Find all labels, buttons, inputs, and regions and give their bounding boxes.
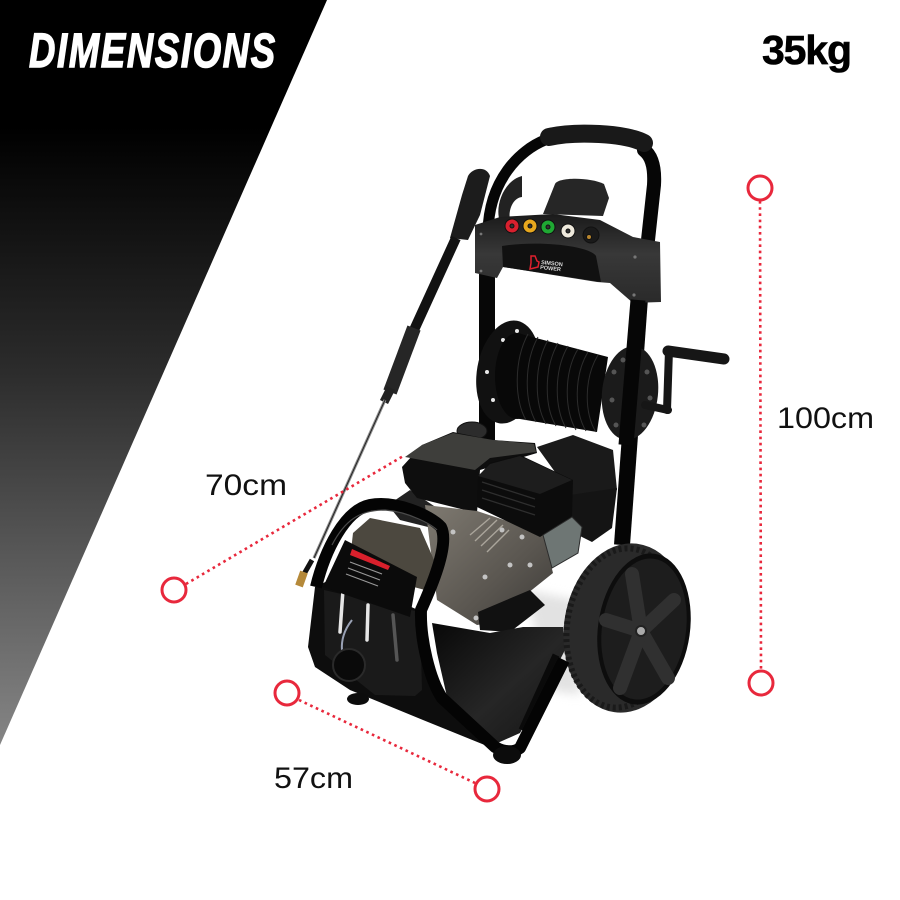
carburettor cover [543, 517, 582, 568]
upright clamp over reel [626, 300, 638, 445]
engine cover top face [405, 433, 536, 470]
fuel tank [537, 435, 617, 503]
front plate shell [308, 575, 497, 750]
frame feet [347, 693, 521, 764]
height dimension line [748, 176, 773, 695]
fuel cap [457, 422, 487, 440]
spray lance [299, 169, 490, 586]
brand logo: SIMSON [541, 260, 563, 268]
wheel [553, 535, 700, 721]
right upright tube [622, 298, 640, 545]
tip holder cover [543, 179, 609, 216]
engine top cover [402, 432, 537, 513]
air filter box [477, 455, 573, 537]
width dimension line [275, 681, 499, 801]
panel screws [480, 233, 637, 297]
reel rear flange [468, 315, 548, 429]
crankcase [425, 505, 553, 625]
spec plate [323, 540, 417, 617]
weight label: 35kg [762, 27, 852, 73]
hose reel coil [495, 333, 608, 432]
reel crank handle [645, 350, 724, 410]
nozzle tips [505, 219, 599, 243]
control panel body [475, 214, 661, 303]
left upright tube [479, 270, 495, 440]
brand logo: POWER [540, 265, 561, 273]
ground shadow [525, 590, 580, 695]
sight tube and cap [333, 620, 365, 681]
depth label: 70cm [205, 469, 287, 502]
dark badge strip on panel [502, 244, 601, 282]
front tube frame [316, 504, 564, 751]
height label: 100cm [777, 402, 874, 435]
tray right rail [522, 655, 556, 730]
diagonal gradient banner [0, 0, 327, 745]
tank support and fittings [568, 488, 617, 542]
depth dimension line [162, 455, 405, 602]
cooling fins [470, 518, 509, 552]
plate slots [340, 590, 397, 660]
rear wheel behind frame [388, 490, 440, 530]
front plate panel [324, 590, 422, 696]
engine bolts [450, 528, 532, 620]
title: DIMENSIONS [29, 24, 277, 78]
pump housing [350, 518, 434, 590]
handle frame tubes [488, 140, 654, 240]
base tray [432, 623, 565, 745]
hook behind panel [498, 176, 522, 222]
reel front flange [597, 343, 663, 443]
width label: 57cm [274, 762, 353, 795]
engine mount [478, 590, 545, 632]
foam handle grip [549, 134, 644, 143]
pressure washer product illustration [299, 134, 724, 764]
brand logo [530, 256, 563, 273]
tube highlight [332, 510, 437, 545]
